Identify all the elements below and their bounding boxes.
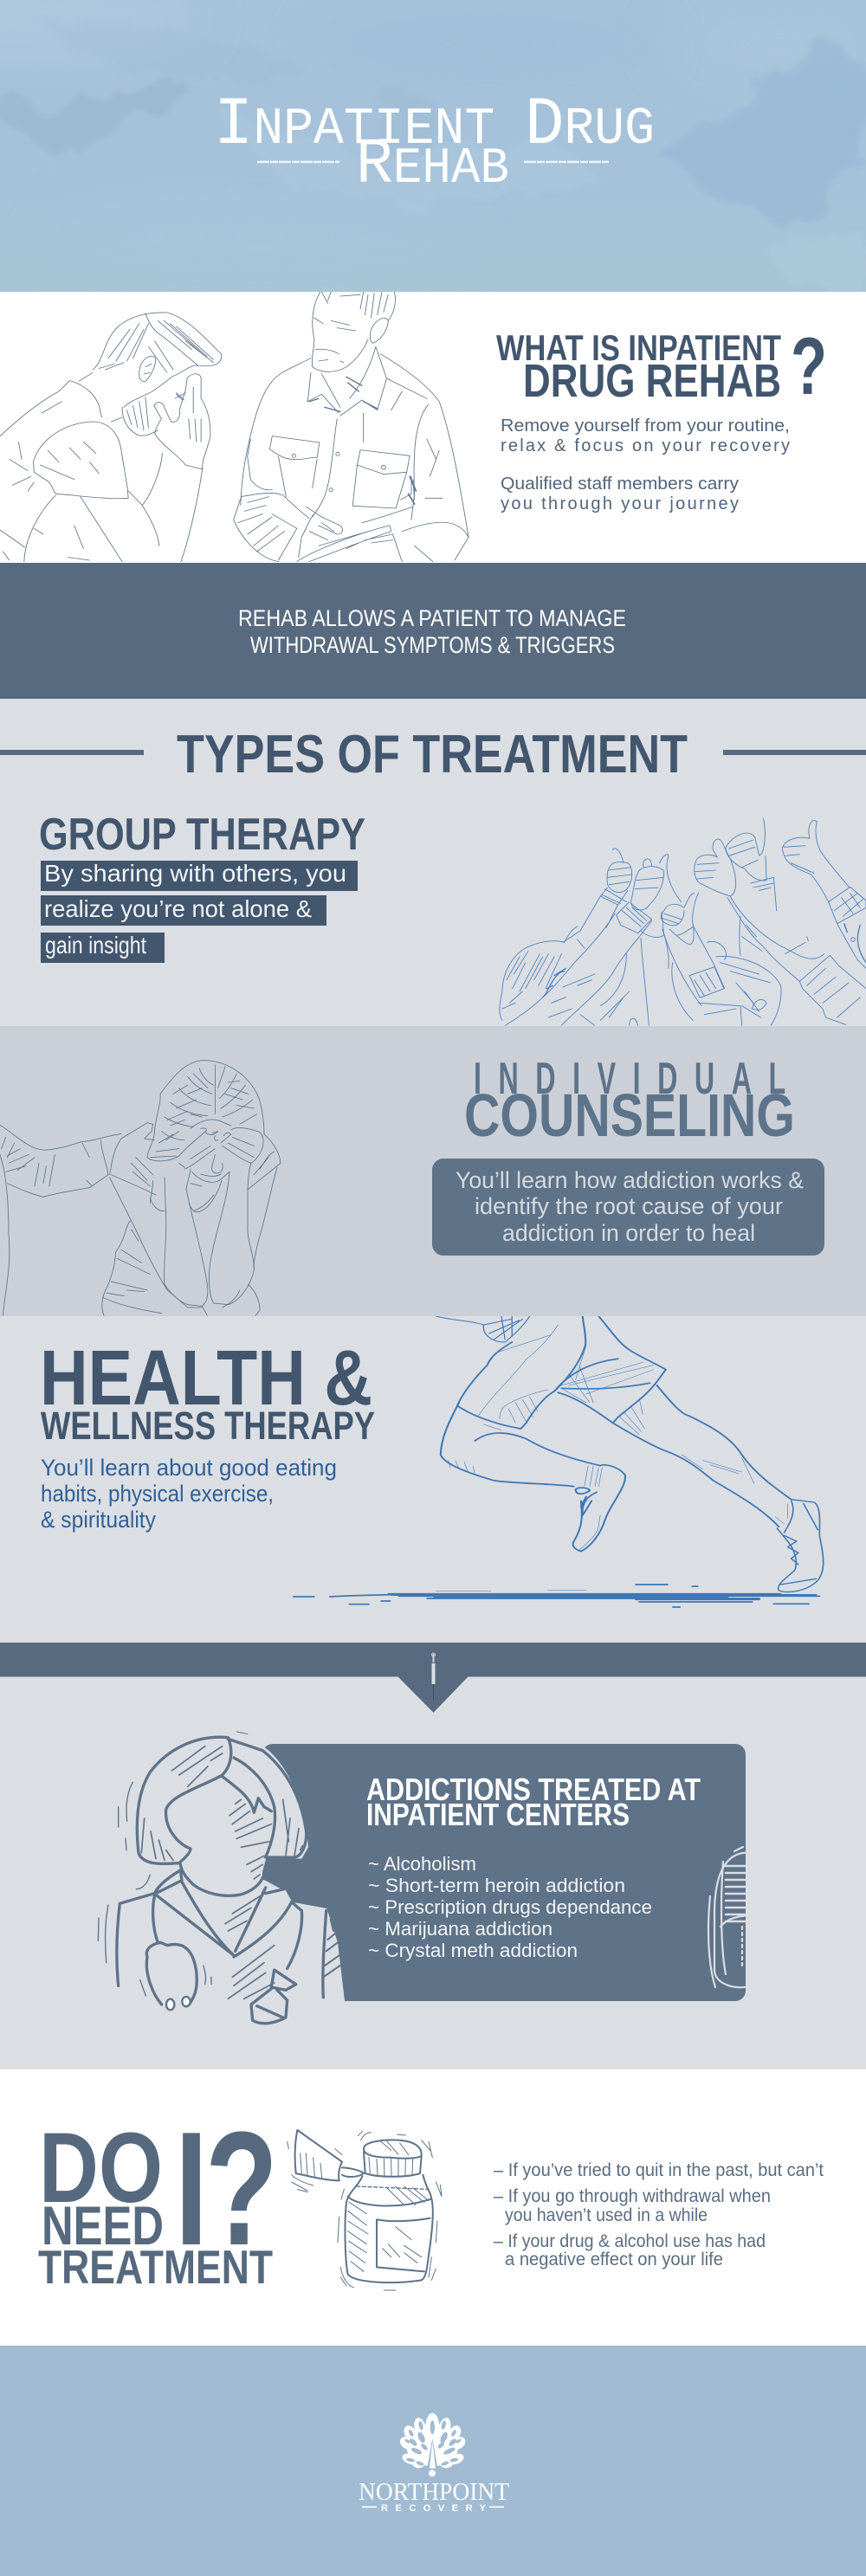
counselor [234, 292, 469, 562]
heading: group therapy: GROUP THERAPY [39, 810, 365, 860]
list: addictions: ~ Alcoholism [368, 1853, 476, 1875]
heading: do i need treatment [38, 2098, 278, 2294]
heading: what is inpatient drug rehab: ? [791, 320, 827, 411]
title dashes [257, 161, 609, 163]
list: addictions: ~ Crystal meth addiction [368, 1940, 578, 1961]
heading: individual counseling: COUNSELING [464, 1081, 795, 1149]
logo text: RECOVERY [381, 2503, 487, 2514]
heading: addictions treated: INPATIENT CENTERS [366, 1797, 630, 1832]
body text: health description: & spirituality [41, 1507, 156, 1533]
panel: group therapy [0, 699, 866, 1026]
heading: health and wellness: HEALTH & [40, 1335, 372, 1422]
illustration: runner legs [294, 1316, 824, 1607]
illustration: distressed woman [0, 1061, 281, 1315]
illustration: doctor [87, 1729, 345, 2032]
banner: rehab allows [0, 563, 866, 699]
illustration: pill bottle [288, 2130, 442, 2290]
heading: do i need treatment: DO [39, 2113, 163, 2224]
list: addictions [368, 1853, 652, 1961]
text boxes: group therapy description: By sharing with others, you [44, 860, 346, 887]
callout: individual counseling description: You’ll learn how addiction works & [456, 1167, 804, 1193]
patient [0, 313, 222, 562]
heading: what is inpatient drug rehab: DRUG REHAB [523, 355, 781, 407]
list: addictions: ~ Short-term heroin addiction [368, 1875, 625, 1896]
list: addictions: ~ Marijuana addiction [368, 1918, 553, 1940]
text boxes: group therapy description: realize you’re not alone & [44, 895, 312, 922]
title: INPATIENT DRUG [214, 87, 655, 164]
panel: do i need treatment [0, 2069, 866, 2346]
body text: rehab description: relax & focus on your recovery [501, 436, 790, 455]
body text: treatment signs: – If your drug & alcohol use has had [494, 2231, 766, 2251]
decorative pill at right edge [707, 1846, 746, 1988]
heading: do i need treatment: TREATMENT [38, 2240, 273, 2294]
heading: what is inpatient drug rehab [496, 320, 827, 411]
logo text: NORTHPOINT [359, 2478, 509, 2506]
panel: hero header [0, 0, 866, 292]
title [214, 87, 655, 202]
panel: addictions treated [0, 1676, 866, 2069]
panel: health and wellness therapy [0, 1316, 866, 1643]
text boxes: group therapy description: gain insight [45, 932, 146, 959]
heading: types of treatment: TYPES OF TREATMENT [177, 725, 688, 784]
panel: what is inpatient drug rehab [0, 292, 866, 563]
heading: health and wellness [40, 1335, 375, 1448]
heading: do i need treatment: I [175, 2098, 208, 2279]
body text: treatment signs: you haven’t used in a while [505, 2205, 708, 2225]
body text: treatment signs: a negative effect on your life [505, 2250, 723, 2269]
logo: northpoint peacock [397, 2413, 468, 2476]
heading: do i need treatment: NEED [42, 2196, 164, 2256]
heading: health and wellness: WELLNESS THERAPY [41, 1404, 375, 1448]
body text: rehab description: you through your journey [501, 494, 739, 513]
body text: rehab description: Qualified staff members carry [501, 475, 739, 494]
banner text [238, 605, 626, 658]
title: REHAB [356, 129, 509, 202]
banner text: WITHDRAWAL SYMPTOMS & TRIGGERS [250, 632, 615, 658]
body text: treatment signs: – If you go through withdrawal when [494, 2186, 771, 2206]
body text: treatment signs: – If you’ve tried to quit in the past, but can’t [494, 2160, 824, 2180]
illustration: thumbs up hands [500, 818, 866, 1025]
body text: health description: You’ll learn about good eating [41, 1455, 337, 1481]
icon: syringe [431, 1653, 435, 1700]
watercolor background [0, 0, 866, 292]
body text: health description: habits, physical exercise, [41, 1481, 274, 1507]
body text: health description [41, 1455, 337, 1533]
callout: individual counseling description: identify the root cause of your [475, 1193, 783, 1219]
heading: addictions treated [366, 1772, 701, 1832]
card: addictions treated [87, 1729, 753, 2032]
heading: individual counseling [464, 1054, 795, 1149]
body text: rehab description [501, 416, 790, 513]
illustration: counselor and patient [0, 292, 469, 562]
body text: treatment signs [494, 2160, 824, 2269]
heading: individual counseling: INDIVIDUAL [474, 1054, 785, 1104]
text boxes: group therapy description [41, 860, 358, 963]
list: addictions: ~ Prescription drugs dependance [368, 1896, 652, 1918]
callout: individual counseling description: addiction in order to heal [502, 1220, 755, 1246]
panel: footer [0, 2346, 866, 2576]
callout: individual counseling description [432, 1159, 824, 1256]
banner text: REHAB ALLOWS A PATIENT TO MANAGE [238, 605, 626, 631]
heading: do i need treatment: ? [205, 2098, 278, 2279]
body text: rehab description: Remove yourself from your routine, [501, 416, 790, 436]
heading: addictions treated: ADDICTIONS TREATED AT [366, 1772, 701, 1807]
panel: individual counseling [0, 1026, 866, 1316]
heading: what is inpatient drug rehab: WHAT IS INPATIENT [496, 327, 781, 368]
arrow banner: divider with syringe [0, 1643, 866, 1713]
